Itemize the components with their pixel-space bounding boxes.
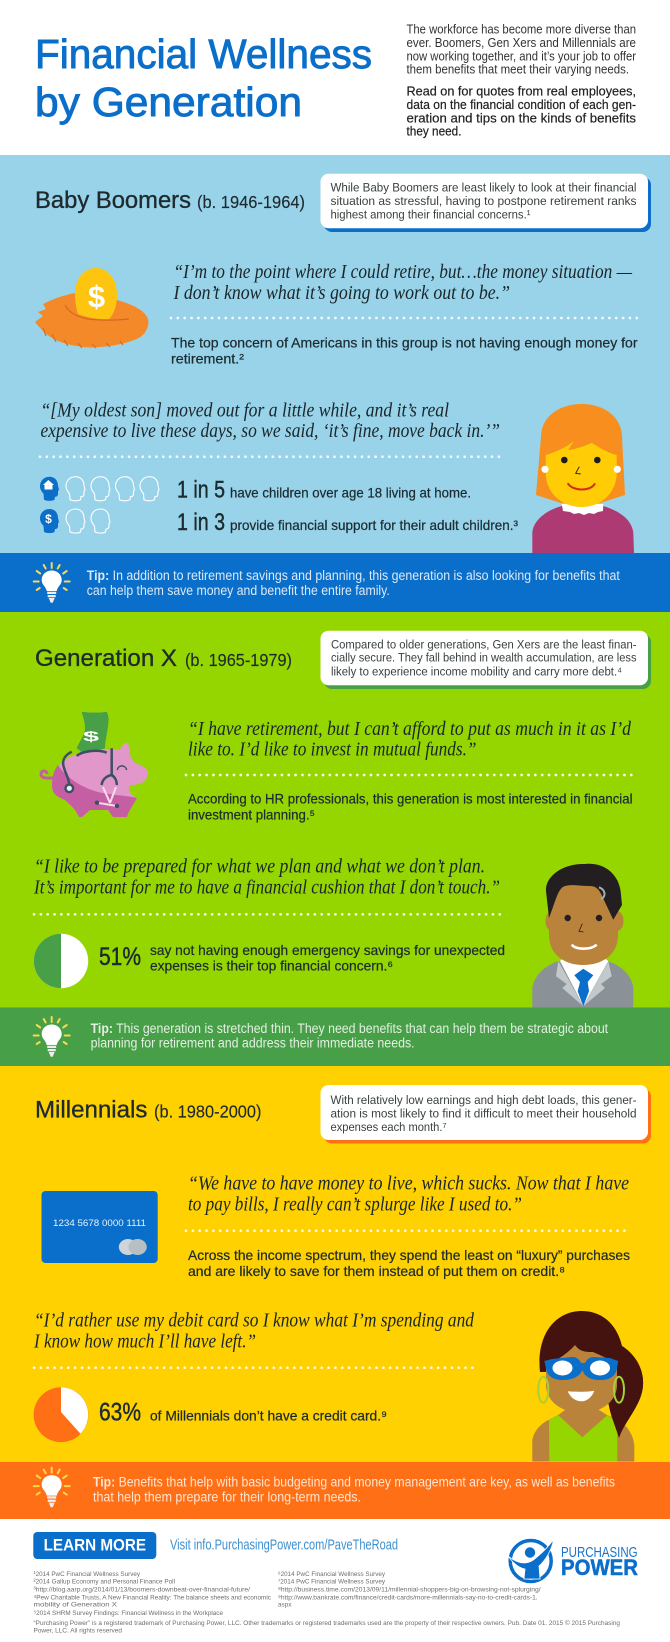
icon: credit card: 1234 5678 0000 1111: [53, 1218, 146, 1228]
icon: piggy bank with stethoscope: [41, 712, 148, 817]
title: by Generation: [35, 79, 302, 125]
heading: millennials: [35, 1096, 262, 1123]
stat: 1 in 3: [177, 509, 518, 536]
panel: baby boomers tip: [0, 553, 670, 612]
text: top concern: [171, 335, 638, 366]
intro text: they need.: [406, 125, 462, 139]
panel: millennials: [0, 1066, 670, 1462]
tip text: can help them save money and benefit the entire family.: [87, 583, 390, 598]
quote: retire: [173, 261, 632, 304]
stat: 1 in 5: have children over age 18 living at home.: [230, 485, 471, 500]
intro text: [406, 22, 636, 139]
stat: 63%: of Millennials don’t have a credit card.⁹: [150, 1409, 387, 1424]
intro text: data on the financial condition of each gen-: [406, 98, 636, 112]
icon: gen x man: [532, 864, 633, 1008]
icon: 1 in 3 heads: [40, 509, 110, 533]
callout: millennials summary: With relatively low earnings and high debt loads, this gener-: [330, 1093, 636, 1107]
tip text: Tip: Benefits that help with basic budgeting and money management are key, as well as benefits: [93, 1475, 615, 1490]
logo: purchasing power: PURCHASING: [561, 1545, 638, 1561]
tip text: planning for retirement and address their immediate needs.: [91, 1036, 415, 1051]
tip text: Tip: In addition to retirement savings and planning, this generation is also looking for benefits that: [87, 568, 620, 583]
icon: 1 in 3 heads: $: [45, 512, 52, 526]
icon: light bulb: [34, 563, 70, 603]
quote: retirement funds: like to. I’d like to invest in mutual funds.”: [188, 739, 476, 761]
heading: millennials: Millennials: [35, 1096, 147, 1123]
link text: Visit info.PurchasingPower.com/PaveTheRoad: [170, 1536, 398, 1553]
quote: retirement funds: [188, 718, 632, 761]
tip text: [91, 1021, 608, 1051]
quote: oldest son: “[My oldest son] moved out for a little while, and it’s real: [40, 400, 449, 422]
callout: generation x summary: likely to experience income mobility and carry more debt.⁴: [331, 664, 622, 678]
intro text: Read on for quotes from real employees,: [406, 84, 636, 98]
quote: oldest son: [40, 400, 500, 442]
stat: 63%: [99, 1399, 387, 1427]
heading: millennials: (b. 1980-2000): [154, 1101, 262, 1121]
intro text: eration and tips on the kinds of benefits: [406, 111, 636, 125]
button: learn more: [33, 1532, 156, 1559]
tip text: that help them prepare for their long-term needs.: [93, 1490, 361, 1505]
tip text: [93, 1475, 615, 1505]
text: luxury purchases: Across the income spectrum, they spend the least on “luxury” purchases: [188, 1248, 630, 1263]
quote: oldest son: expensive to live these days, so we said, ‘it’s fine, move back in.’”: [40, 420, 500, 442]
icon: nest egg: [35, 268, 148, 348]
intro text: them benefits that meet their varying needs.: [406, 63, 629, 77]
button: learn more: LEARN MORE: [44, 1537, 146, 1555]
quote: financial cushion: It’s important for me to have a financial cushion that I don’t touch.”: [33, 876, 500, 898]
chart: 51% pie: [34, 934, 88, 988]
icon: credit card: [42, 1191, 158, 1263]
text: hr professionals: investment planning.⁵: [188, 807, 315, 822]
heading: generation x: (b. 1965-1979): [185, 650, 292, 670]
tip text: [87, 568, 620, 598]
quote: debit card: [33, 1310, 475, 1352]
text: top concern: retirement.²: [171, 351, 244, 366]
logo: purchasing power: POWER: [561, 1555, 638, 1580]
stat: 1 in 5: [177, 476, 471, 503]
icon: millennial woman: [532, 1311, 643, 1462]
intro text: The workforce has become more diverse than: [406, 22, 636, 36]
logo: purchasing power: [508, 1540, 638, 1582]
callout: baby boomers summary: highest among their financial concerns.¹: [330, 207, 530, 221]
legal text: “Purchasing Power” is a registered trademark of Purchasing Power, LLC. Other trademarks or registered trademarks used are the property of their respective owners. Pub. Date 01. 2015 © 2015 Purchasing: [34, 1619, 620, 1627]
quote: financial cushion: [33, 856, 500, 898]
heading: generation x: Generation X: [35, 645, 177, 672]
panel: millennials tip: [0, 1462, 670, 1519]
callout: millennials summary: [320, 1085, 651, 1144]
stat: 51%: 51%: [99, 943, 141, 971]
footnotes: right column: ⁸http://business.time.com/2013/09/11/millennial-shoppers-big-on-browsing-not-splurging/: [278, 1586, 541, 1593]
footnotes: left column: mobility of Generation X: [34, 1602, 118, 1609]
footnotes: left column: ¹2014 PwC Financial Wellness Survey: [34, 1571, 141, 1578]
callout: generation x summary: [320, 631, 651, 689]
text: top concern: The top concern of Americans in this group is not having enough money for: [171, 335, 638, 350]
callout: generation x summary: cially secure. They fall behind in wealth accumulation, are less: [331, 651, 636, 665]
panel: baby boomers: [0, 155, 670, 553]
heading: baby boomers: Baby Boomers: [35, 187, 191, 214]
heading: generation x: [35, 645, 292, 672]
quote: debit card: “I’d rather use my debit card so I know what I’m spending and: [34, 1310, 475, 1332]
stat: 51%: expenses is their top financial concern.⁶: [150, 959, 393, 974]
footnotes: right column: ⁶2014 PwC Financial Wellness Survey: [278, 1571, 386, 1578]
icon: light bulb: [34, 1017, 70, 1057]
footnotes: right column: ⁹http://www.bankrate.com/finance/credit-cards/more-millennials-say-no-to-credit-cards-1.: [278, 1594, 538, 1601]
intro text: ever. Boomers, Gen Xers and Millennials are: [406, 36, 636, 50]
text: luxury purchases: and are likely to save for them instead of put them on credit.⁸: [188, 1264, 565, 1279]
stat: 1 in 3: 1 in 3: [177, 509, 225, 536]
legal text: Power, LLC. All rights reserved: [34, 1627, 122, 1634]
stat: 1 in 3: provide financial support for their adult children.³: [230, 518, 518, 533]
heading: baby boomers: [35, 187, 305, 214]
callout: millennials summary: expenses each month.⁷: [330, 1120, 446, 1134]
callout: baby boomers summary: situation as stressful, having to postpone retirement ranks: [330, 194, 636, 208]
callout: baby boomers summary: [320, 174, 651, 232]
callout: baby boomers summary: While Baby Boomers are least likely to look at their financial: [330, 181, 636, 195]
text: luxury purchases: [188, 1248, 630, 1279]
footnotes: left column: ²2014 Gallup Economy and Personal Finance Poll: [34, 1578, 175, 1586]
footnotes: right column: [278, 1571, 541, 1609]
stat: 63%: 63%: [99, 1399, 141, 1427]
title: [35, 31, 372, 125]
quote: financial cushion: “I like to be prepared for what we plan and what we don’t plan.: [34, 856, 485, 878]
icon: boomer woman: [532, 404, 634, 553]
legal text: [34, 1619, 620, 1634]
panel: generation x: [0, 612, 670, 1008]
text: hr professionals: [188, 791, 632, 822]
icon: piggy bank with stethoscope: $: [83, 728, 99, 744]
quote: have to pay bills: “We have to have money to live, which sucks. Now that I have: [188, 1172, 629, 1194]
stat: 1 in 5: 1 in 5: [177, 476, 225, 503]
quote: have to pay bills: to pay bills, I really can’t splurge like I used to.”: [188, 1194, 522, 1216]
icon: light bulb: [34, 1468, 70, 1507]
quote: have to pay bills: [188, 1172, 629, 1216]
footnotes: right column: aspx: [278, 1602, 292, 1609]
icon: nest egg: $: [88, 279, 105, 314]
footnotes: left column: ³http://blog.aarp.org/2014/01/13/boomers-downbeat-over-financial-future/: [34, 1586, 250, 1593]
footnotes: left column: [34, 1571, 272, 1617]
footnotes: left column: ⁴Pew Charitable Trusts, A New Financial Reality: The balance sheets and economic: [34, 1594, 272, 1601]
heading: baby boomers: (b. 1946-1964): [197, 192, 305, 212]
callout: generation x summary: Compared to older generations, Gen Xers are the least finan-: [331, 637, 636, 651]
stat: 51%: [99, 943, 505, 974]
footnotes: left column: ⁵2014 SHRM Survey Findings: Financial Wellness in the Workplace: [34, 1610, 223, 1617]
quote: debit card: I know how much I’ll have left.”: [33, 1330, 256, 1352]
quote: retire: I don’t know what it’s going to work out to be.”: [173, 282, 510, 304]
chart: 63% pie: [34, 1387, 88, 1442]
intro text: now working together, and it’s your job to offer: [406, 49, 636, 63]
text: hr professionals: According to HR professionals, this generation is most interested in financial: [188, 791, 632, 806]
callout: millennials summary: ation is most likely to find it difficult to meet their household: [330, 1107, 637, 1121]
title: Financial Wellness: [35, 31, 372, 77]
panel: generation x tip: [0, 1008, 670, 1066]
stat: 51%: say not having enough emergency savings for unexpected: [150, 943, 505, 958]
footnotes: right column: ⁷2014 PwC Financial Wellness Survey: [278, 1578, 386, 1586]
icon: 1 in 5 heads: [40, 477, 159, 501]
tip text: Tip: This generation is stretched thin. They need benefits that can help them be strategic about: [91, 1021, 608, 1036]
